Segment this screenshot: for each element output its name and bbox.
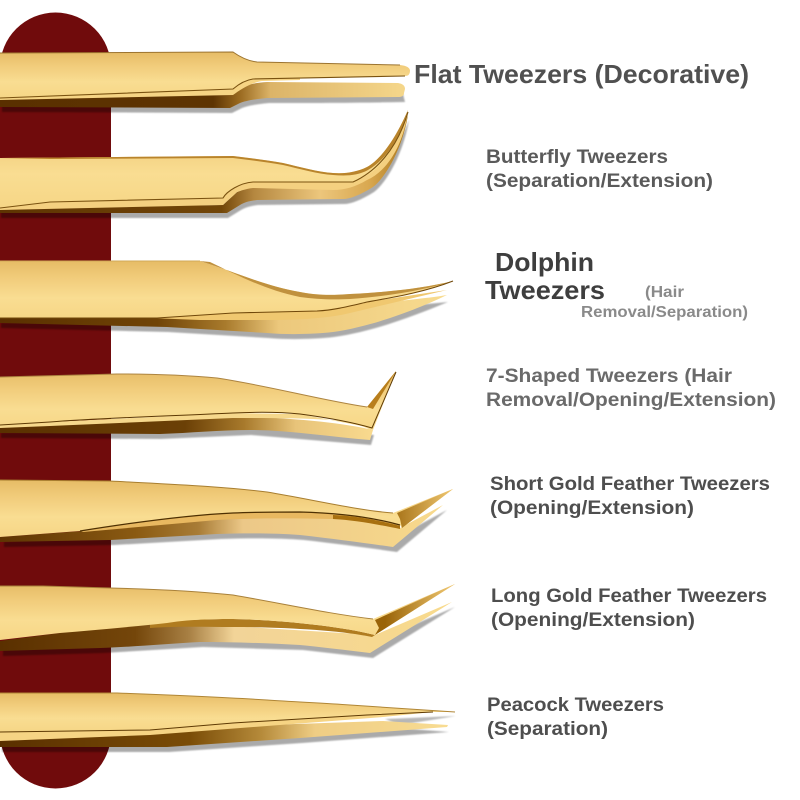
upper arm <box>0 261 453 318</box>
tweezer: flat <box>0 52 410 113</box>
lower arm <box>0 505 443 547</box>
lower arm <box>0 602 452 653</box>
shadow <box>1 120 409 218</box>
label: butterfly tweezers <box>486 147 713 192</box>
label: long gold feather tweezers: (Opening/Extension) <box>491 610 695 631</box>
tweezer: butterfly <box>0 110 409 218</box>
gold band <box>150 619 375 637</box>
label: butterfly tweezers: Butterfly Tweezers <box>486 147 668 168</box>
upper arm <box>0 584 455 640</box>
lower arm <box>0 295 447 334</box>
light band <box>0 413 372 430</box>
upper arm <box>0 52 410 98</box>
shadow <box>1 302 448 339</box>
tweezer: long gold feather <box>0 584 455 658</box>
light band <box>0 112 408 210</box>
label: short gold feather tweezers: (Opening/Extension) <box>490 498 694 519</box>
edge band <box>0 110 408 175</box>
label: butterfly tweezers: (Separation/Extension) <box>486 171 713 192</box>
shadow <box>1 423 374 445</box>
lower arm <box>0 115 408 213</box>
label: short gold feather tweezers: Short Gold Feather Tweezers <box>490 474 770 495</box>
label: short gold feather tweezers <box>490 474 770 519</box>
light band <box>0 78 300 100</box>
light band <box>0 712 433 741</box>
tweezer: peacock <box>0 693 456 752</box>
label: dolphin tweezers <box>485 247 748 321</box>
upper arm <box>0 371 396 430</box>
label: long gold feather tweezers: Long Gold Feather Tweezers <box>491 586 767 607</box>
red vertical rounded bar <box>0 12 111 788</box>
label: peacock tweezers <box>487 695 664 740</box>
light band <box>150 290 447 320</box>
label: dolphin tweezers: Removal/Separation) <box>581 304 748 321</box>
label: 7-shaped tweezers: Removal/Opening/Extension) <box>486 390 776 411</box>
tweezer: short gold feather <box>0 480 453 552</box>
lower arm <box>0 82 405 108</box>
label: peacock tweezers: Peacock Tweezers <box>487 695 664 716</box>
label: dolphin tweezers: Dolphin <box>495 247 594 277</box>
shadow <box>2 727 449 752</box>
shadow <box>3 607 455 658</box>
label: peacock tweezers: (Separation) <box>487 719 608 740</box>
label: flat tweezers: Flat Tweezers (Decorative) <box>414 59 749 89</box>
upper arm <box>0 480 453 537</box>
shadow <box>2 90 405 113</box>
upper arm <box>0 693 455 732</box>
shadow <box>4 510 447 552</box>
light band <box>80 512 400 532</box>
label: 7-shaped tweezers: 7-Shaped Tweezers (Hair <box>486 366 733 387</box>
tweezer: dolphin <box>0 261 453 339</box>
upper arm <box>0 110 408 208</box>
lower arm <box>0 416 373 440</box>
tweezer: 7-shaped <box>0 371 396 445</box>
label: 7-shaped tweezers <box>486 366 776 411</box>
label: long gold feather tweezers <box>491 586 767 631</box>
label: dolphin tweezers: Tweezers <box>485 275 605 305</box>
label: dolphin tweezers: (Hair <box>645 284 684 301</box>
lower arm <box>0 721 448 747</box>
edge band <box>200 261 453 299</box>
